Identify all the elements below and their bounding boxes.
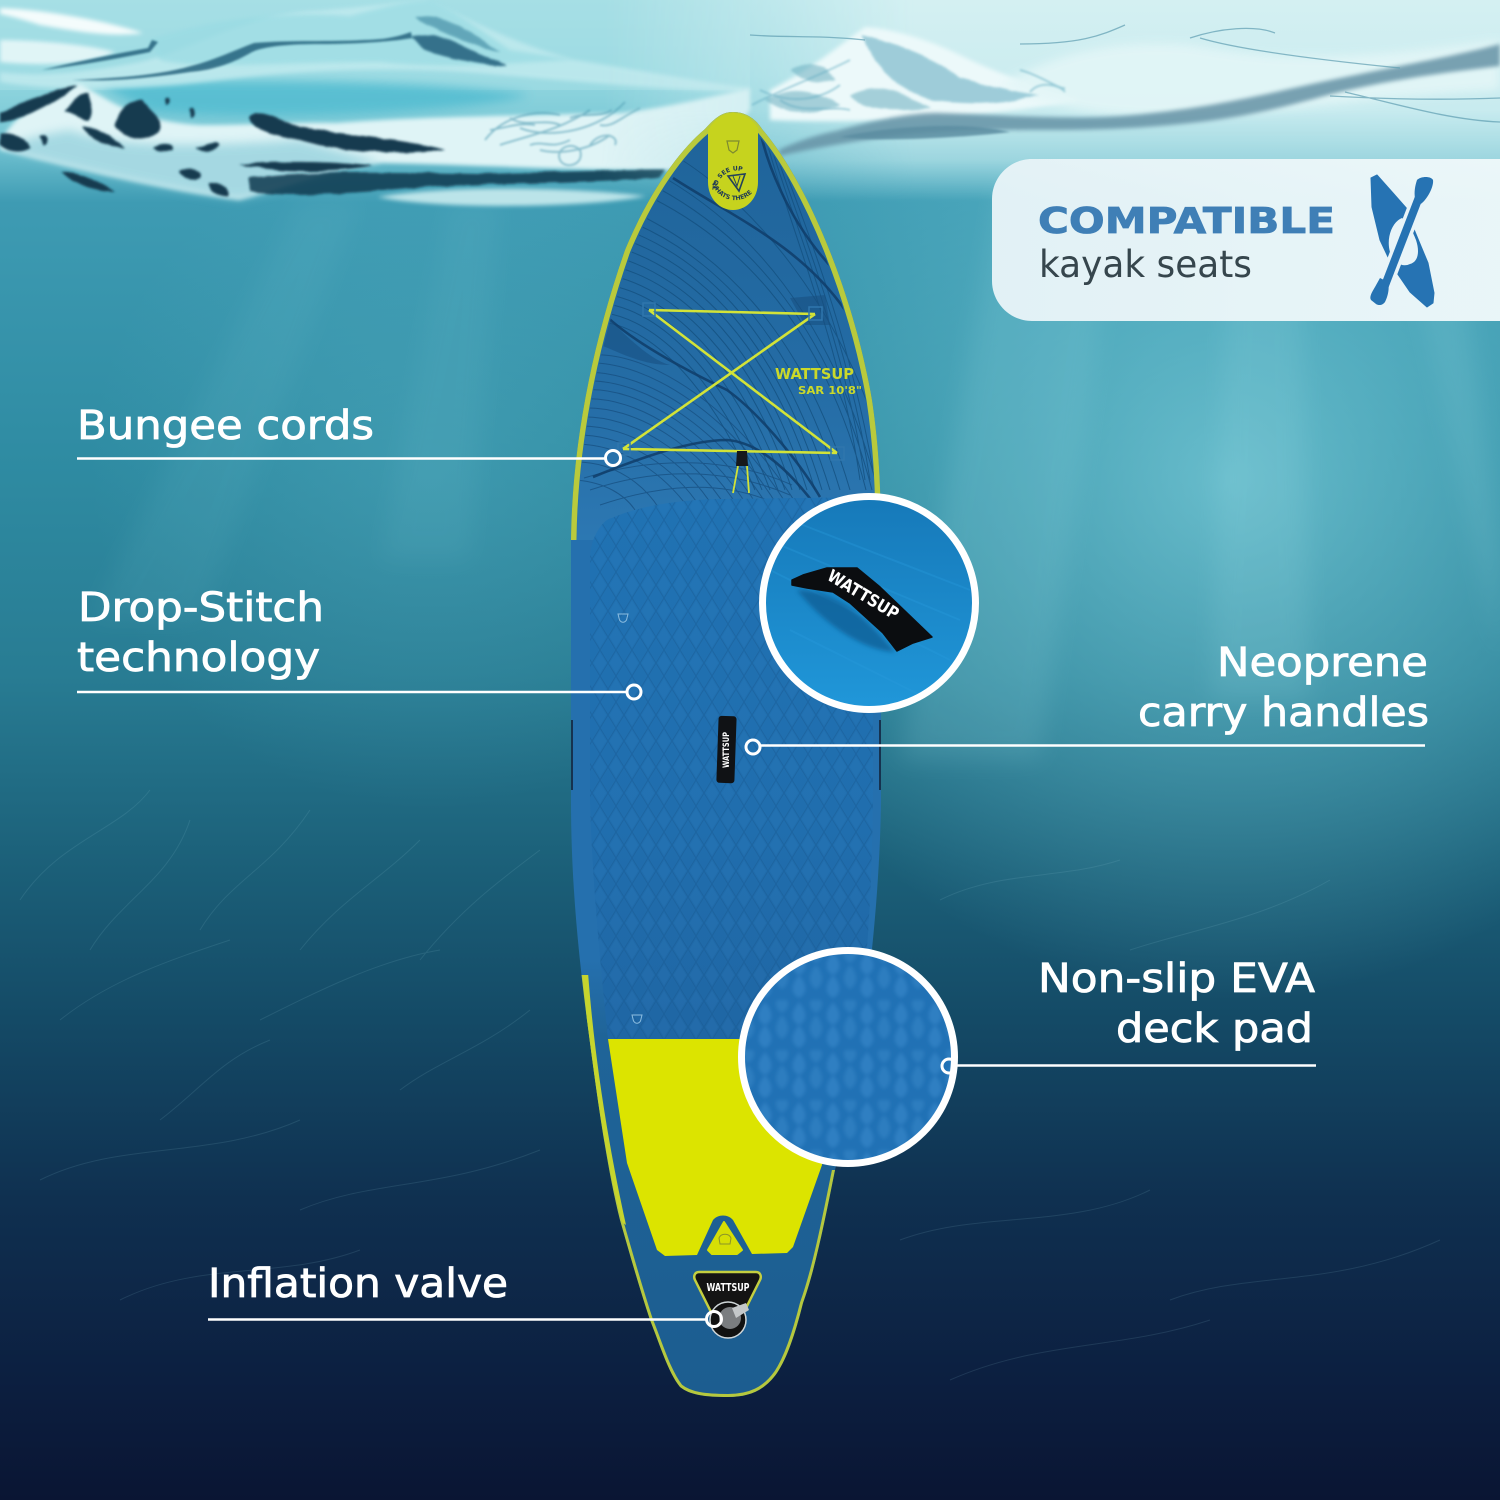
callout: drop-stitch technology: Drop-Stitch [78,585,324,631]
small carry handle: WATTSUP [722,732,732,768]
detail circle: neoprene handle [762,496,976,710]
callout: inflation valve [208,1261,722,1326]
yellow rail tail [582,975,835,1397]
board model text: SAR 10'8" [798,384,862,397]
board model text [775,365,862,397]
side grips [571,720,881,790]
bungee cords [618,303,844,493]
bungee clip [736,451,748,466]
callout: non-slip EVA deck pad: deck pad [1116,1006,1313,1052]
seagrass texture [20,790,1440,1380]
valve logo badge [694,1272,761,1338]
callout: neoprene carry handles: carry handles [1138,690,1429,736]
panel: compatible kayak seats [992,159,1500,321]
dark band [779,44,1500,156]
nose patch: TO SEE UP [712,166,742,190]
valve logo badge: WATTSUP [706,1282,750,1294]
detail circle: EVA deck pad [735,945,961,1169]
callout: bungee cords [77,403,620,466]
white surface mass [0,84,750,200]
water surface right [600,0,1500,200]
callout: drop-stitch technology: technology [77,635,320,681]
yellow triangle pad [708,1222,742,1254]
yellow traction tail pad [608,1039,840,1256]
callout: neoprene carry handles: Neoprene [1217,640,1428,686]
callout: bungee cords: Bungee cords [77,403,374,449]
board body [571,112,881,1397]
callout: inflation valve: Inflation valve [208,1261,508,1307]
icon: kayak and paddle [1370,175,1434,307]
dark wave lines [42,32,412,81]
nose patch: WHATS THERE [712,181,752,200]
callout: non-slip EVA deck pad: Non-slip EVA [1038,956,1316,1002]
detail circle: neoprene handle: WATTSUP [823,566,902,624]
heading: compatible: COMPATIBLE [1038,201,1335,242]
dark streaks [0,86,665,197]
water surface left [0,0,750,206]
label: kayak seats: kayak seats [1039,243,1252,286]
deck pad [590,497,873,1039]
bow with fan lines [580,138,874,510]
yellow rail top [571,112,881,540]
paddle board [571,112,881,1397]
wave crest [150,0,575,65]
callout: non-slip EVA deck pad [942,956,1316,1073]
thin water lines [750,25,1500,122]
nose patch [708,113,758,210]
small carry handle [716,716,737,783]
spray [485,102,640,165]
callout: drop-stitch technology [77,585,641,699]
callout: neoprene carry handles [746,640,1429,754]
board model text: WATTSUP [775,365,854,383]
